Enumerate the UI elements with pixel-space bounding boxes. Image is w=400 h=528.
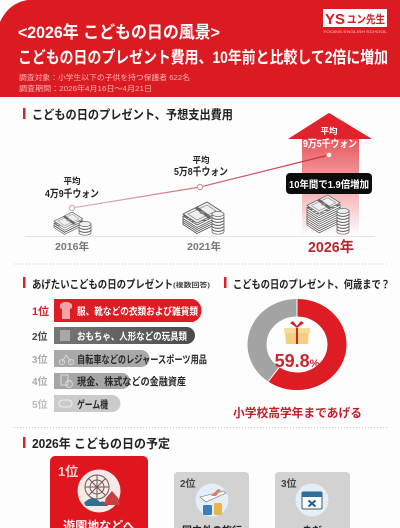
axis line — [25, 236, 375, 237]
donut value: 59.8% — [275, 351, 320, 371]
logo: ユン先生 — [347, 12, 385, 26]
header title: <2026年 こどもの日の風景> — [18, 22, 220, 42]
card: rank 1 — [50, 456, 148, 528]
rank 4: 現金、株式などの金融資産 — [77, 375, 186, 388]
rank 5 — [32, 395, 120, 412]
logo: YOGINS ENGLISH SCHOOL — [323, 29, 388, 34]
section: expected spending — [23, 107, 375, 256]
logo: YS — [325, 11, 345, 28]
logo — [323, 9, 388, 34]
survey details: 調査対象：小学生以下の子供を持つ保護者 622名 — [19, 72, 190, 82]
year labels: 2016年 — [55, 240, 90, 253]
callout: 1.9x increase: 10年間で1.9倍増加 — [289, 178, 369, 191]
card: rank 2 — [174, 472, 249, 528]
icon: money 2026 — [307, 195, 349, 234]
icon: gift box — [284, 321, 310, 344]
year labels: 2021年 — [187, 240, 222, 253]
year labels: 2026年 — [308, 238, 354, 256]
value label 2026 — [303, 126, 357, 150]
rank 1: 服、靴などの衣類および雑貨類 — [77, 305, 198, 318]
value label 2021: 平均 — [192, 155, 210, 165]
rank 4: 4位 — [32, 375, 48, 388]
year labels — [55, 238, 354, 256]
section: gift age — [224, 277, 390, 420]
value label 2016: 4万9千ウォン — [45, 187, 99, 200]
value label 2021 — [174, 155, 228, 178]
section heading: あげたいこどもの日のプレゼント — [32, 277, 173, 291]
icon: calendar — [296, 484, 328, 516]
card: rank 3 — [275, 472, 350, 528]
icon: ferris wheel — [78, 470, 120, 512]
rank 3: 自転車などのレジャースポーツ用品 — [77, 353, 207, 366]
rank 2: 2位 — [32, 330, 48, 343]
section heading: こどもの日のプレゼント、予想支出費用 — [32, 107, 233, 122]
card: rank 1: 1位 — [58, 464, 78, 479]
donut caption: 小学校高学年まであげる — [233, 405, 362, 420]
card: rank 3: 3位 — [281, 477, 297, 490]
header panel — [0, 0, 400, 97]
section: children's day plans — [23, 436, 350, 528]
icon: rising arrow — [288, 113, 372, 236]
section: gift ranking — [23, 277, 210, 412]
card: rank 2: 2位 — [180, 477, 196, 490]
survey details — [19, 72, 190, 93]
rank 3 — [32, 350, 207, 367]
value label 2021: 5万8千ウォン — [174, 165, 228, 178]
rank 3: 3位 — [32, 353, 48, 366]
section heading: 2026年 こどもの日の予定 — [32, 436, 170, 451]
value label 2016 — [45, 176, 99, 200]
value label 2026: 平均 — [320, 126, 338, 136]
survey details: 調査期間：2026年4月16日～4月21日 — [19, 83, 152, 93]
section heading: (複数回答) — [173, 280, 210, 289]
callout: 1.9x increase — [286, 173, 372, 194]
value label 2026: 9万5千ウォン — [303, 137, 357, 150]
rank 2: おもちゃ、人形などの玩具類 — [77, 330, 187, 343]
value label 2016: 平均 — [63, 176, 81, 186]
trend line — [69, 152, 332, 211]
icon: plane and luggage — [196, 484, 228, 516]
rank 4 — [32, 373, 186, 389]
icon: money 2021 — [183, 202, 224, 234]
rank 2 — [32, 327, 195, 344]
rank 1: 1位 — [32, 304, 49, 318]
rank 1 — [32, 299, 202, 322]
icon: money 2016 — [54, 212, 91, 235]
rank 5: 5位 — [32, 398, 48, 411]
donut chart — [257, 299, 337, 382]
rank 5: ゲーム機 — [77, 398, 108, 411]
